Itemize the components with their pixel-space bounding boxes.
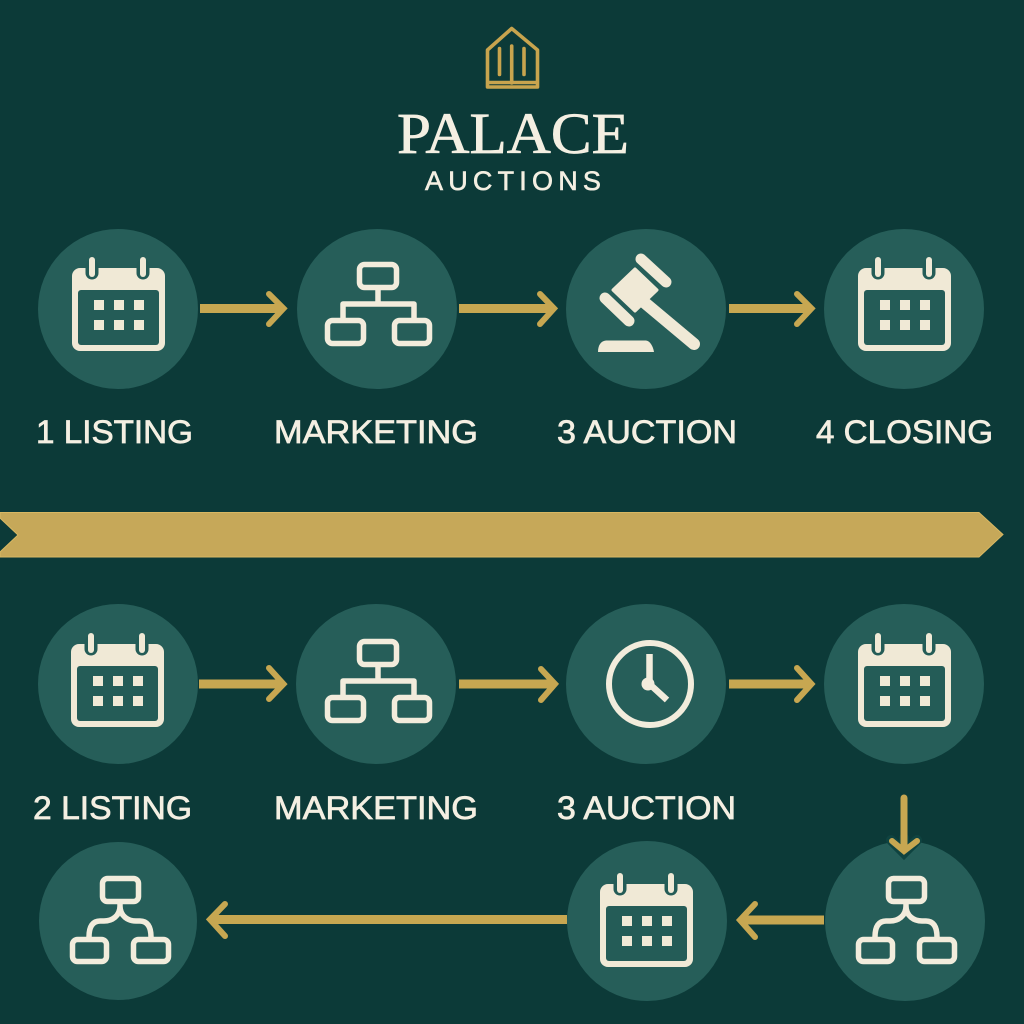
- auction circle with gavel icon: [566, 229, 726, 389]
- arrow: long left arrow: [210, 904, 567, 936]
- closing circle with calendar icon: [824, 229, 984, 389]
- icon: gavel: [598, 259, 694, 352]
- arrow: down arrow into flow circle: [891, 798, 917, 853]
- arrow: row 2 auction to calendar: [729, 668, 812, 700]
- arrow: row 2 marketing to auction: [459, 669, 555, 700]
- wordmark: AUCTIONS: AUCTIONS: [425, 166, 606, 196]
- row 2 right circle with calendar icon: [824, 604, 984, 764]
- wordmark: PALACE: PALACE: [397, 101, 629, 166]
- icon: house logo: [488, 28, 538, 87]
- row 2 auction circle with clock icon: [566, 604, 726, 764]
- label: 1 LISTING: 1 LISTING: [36, 414, 193, 450]
- label: 4 CLOSING: 4 CLOSING: [816, 414, 993, 450]
- marketing circle with org chart icon: [297, 229, 457, 389]
- row 3 centre circle with calendar icon: [567, 841, 727, 1001]
- label: MARKETING row 2: MARKETING: [274, 790, 478, 826]
- label: 3 AUCTION row 2: 3 AUCTION: [557, 790, 736, 826]
- row 3 right circle with flow icon: [825, 841, 985, 1001]
- icon: clock: [609, 643, 691, 725]
- row 2 marketing circle with org chart icon: [296, 604, 456, 764]
- gold ribbon divider: [0, 512, 1003, 557]
- arrow: row 2 listing to marketing: [199, 668, 284, 699]
- label: MARKETING: MARKETING: [274, 414, 478, 450]
- arrow: auction to closing: [729, 294, 812, 324]
- row 2 circle with calendar icon: [38, 604, 198, 764]
- label: 3 AUCTION: 3 AUCTION: [557, 414, 737, 450]
- row 3 left circle with flow icon: [39, 842, 197, 1000]
- label: 2 LISTING: 2 LISTING: [33, 790, 192, 826]
- arrow: step 1 to marketing: [200, 294, 284, 324]
- arrow: marketing to auction: [459, 294, 554, 324]
- logo: Palace Auctions: [397, 28, 629, 196]
- arrow: short left arrow: [740, 904, 824, 937]
- step 1 circle with calendar icon: [38, 229, 198, 389]
